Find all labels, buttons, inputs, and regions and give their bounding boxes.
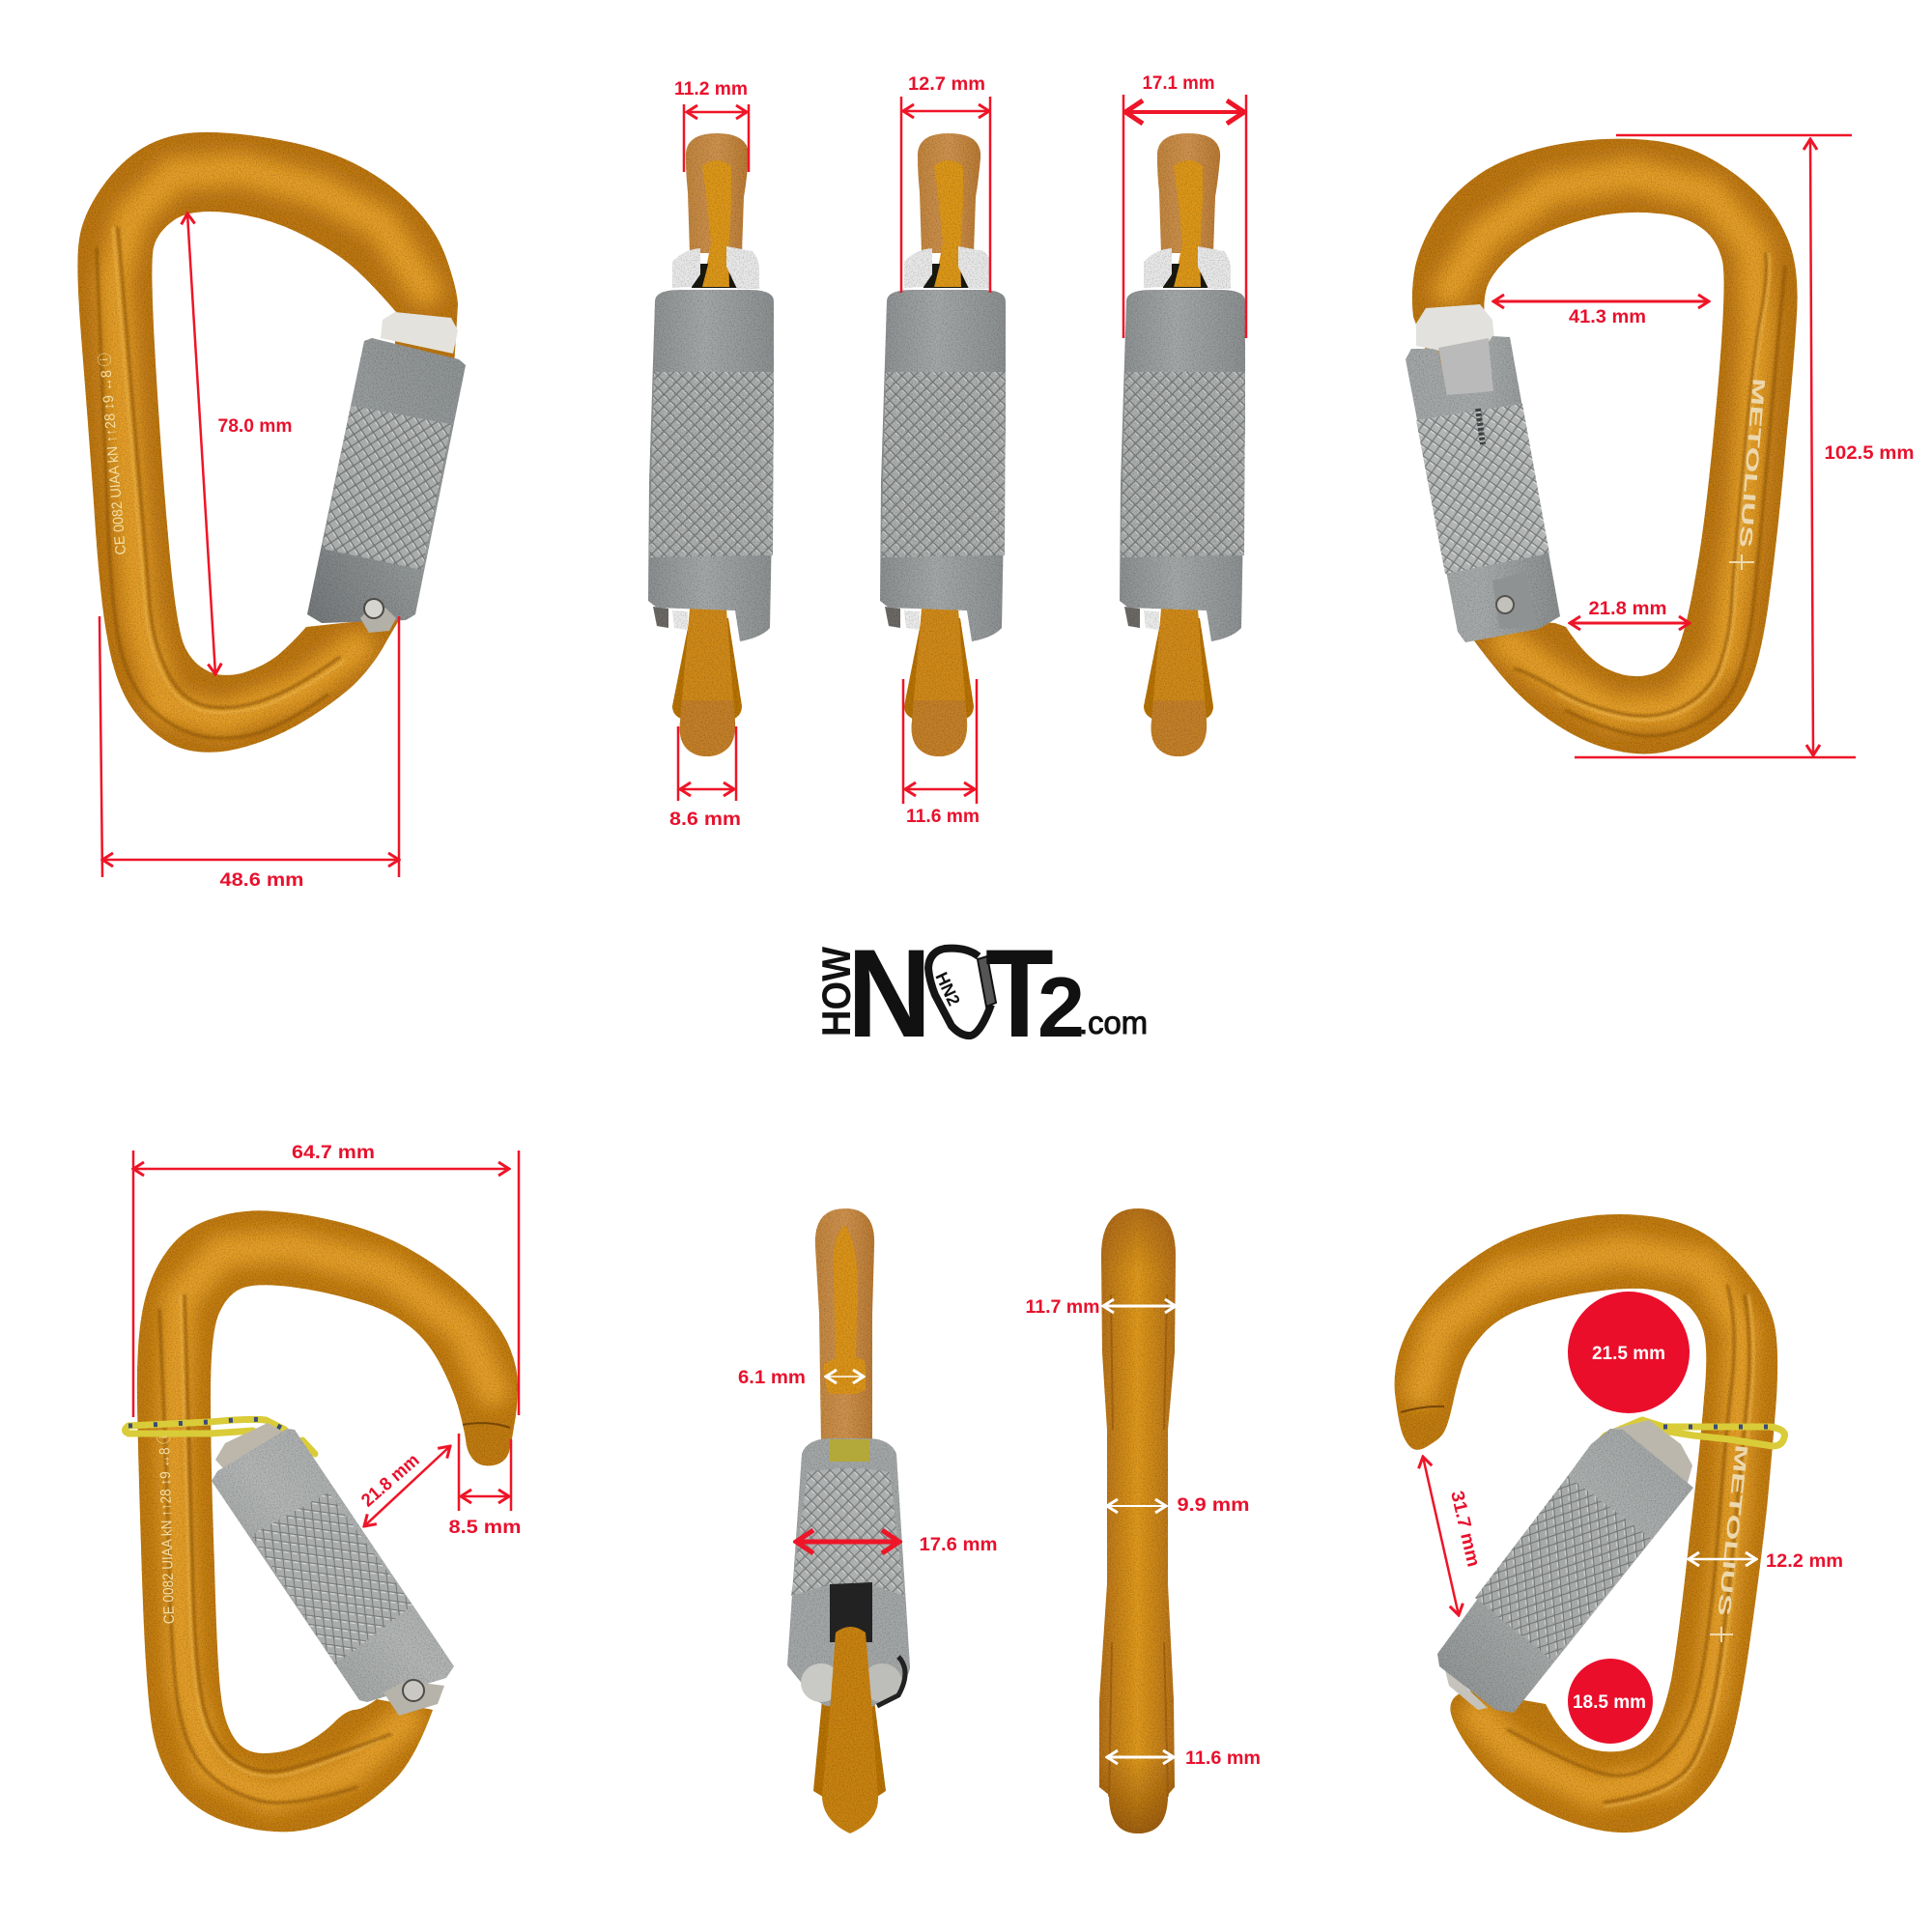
dimension: 21.8 mm gate clearance: 21.8 mm [357, 1450, 423, 1511]
dimension: 11.2 mm [674, 79, 749, 172]
spine ridge lines [1109, 1294, 1168, 1797]
dimension: 11.6 mm [903, 679, 980, 827]
dimension: 8.5 mm nose: 8.5 mm [448, 1518, 522, 1538]
logo: HowNOT2.com [813, 923, 1148, 1065]
dimension: 41.3 mm: 41.3 mm [1569, 307, 1646, 327]
carabiner body orange [130, 1203, 526, 1840]
bright hook strip [824, 1225, 866, 1394]
brand text METOLIUS: METOLIUS [1736, 378, 1769, 549]
logo .com: .com [1079, 1005, 1148, 1040]
knurled grip [322, 406, 451, 570]
orange nose [822, 1627, 878, 1833]
gate open tip [1613, 1420, 1692, 1483]
pin plate [360, 604, 396, 633]
gate white tip [381, 312, 458, 354]
dimension: 8.6 mm [669, 726, 741, 830]
logo numeral 2: 2 [1037, 959, 1085, 1055]
knurled grip [1416, 404, 1549, 574]
dimension: 11.7 mm: 11.7 mm [1026, 1297, 1099, 1318]
gate pin [1496, 596, 1514, 613]
open gate sleeve [1437, 1429, 1693, 1713]
dimension: 21.8 mm gate clearance [357, 1446, 450, 1526]
dimension: 64.7 mm: 64.7 mm [292, 1143, 375, 1163]
panel: carabiner top-right, closed gate back view [1401, 130, 1806, 768]
dimension: 11.6 mm: 11.6 mm [906, 807, 980, 827]
panel: gate side view A [648, 133, 774, 756]
yellow cord knot [830, 1439, 869, 1462]
yellow cord [1594, 1420, 1784, 1448]
circle: 18.5 mm basket [1568, 1659, 1653, 1744]
dimension: 64.7 mm [133, 1143, 519, 1417]
gate lower tip [1444, 1666, 1488, 1710]
pin slot [1492, 572, 1537, 629]
logo carabiner in place of O [928, 949, 996, 1036]
dimension: 21.8 mm [1570, 599, 1690, 623]
dark slot [830, 1582, 872, 1642]
gate pin [364, 599, 384, 618]
engraved certification text: CE 0082 UIAA kN ↑↑28 ↕9 ↔8 ⓘ [97, 352, 129, 555]
circle: 18.5 mm basket: 18.5 mm [1573, 1692, 1646, 1713]
gate open tip [215, 1423, 283, 1478]
gate white tip [1416, 304, 1494, 351]
knurled grip [251, 1492, 412, 1664]
panel: carabiner bottom-right, open gate [1386, 1208, 1784, 1840]
dimension: 78.0 mm inner length [187, 213, 292, 674]
dimension: 102.5 mm length [1575, 135, 1915, 757]
dimension: 21.8 mm: 21.8 mm [1588, 599, 1667, 619]
gate screw detail [1478, 409, 1483, 444]
logo word HOW: HOW [813, 947, 859, 1037]
dimension: 31.7 mm [1423, 1457, 1484, 1615]
dimension: 17.1 mm [1123, 73, 1246, 338]
gate notch interior [1438, 338, 1495, 398]
spine bar [1099, 1208, 1176, 1833]
gate sleeve [787, 1438, 910, 1708]
back prongs [813, 1700, 886, 1799]
logo carabiner in place of O: HN2 [931, 969, 964, 1009]
spine end shading [1099, 1208, 1176, 1833]
dimension: 12.7 mm [901, 74, 990, 293]
panel: gate side view C [1120, 133, 1245, 756]
gate sleeve [307, 338, 466, 623]
panel: gate open side view with cord [787, 1208, 910, 1833]
upper column [815, 1208, 874, 1444]
dimension: 48.6 mm width [99, 616, 399, 891]
brand star mark [1710, 1627, 1733, 1642]
dimension: 102.5 mm length: 102.5 mm [1824, 443, 1915, 464]
knurled grip [791, 1468, 904, 1596]
panel: carabiner top-left, closed gate front view [68, 126, 473, 763]
dimension: 6.1 mm: 6.1 mm [738, 1368, 806, 1388]
dimension: 48.6 mm width: 48.6 mm [220, 870, 303, 891]
dimension: 12.2 mm: 12.2 mm [1766, 1551, 1843, 1572]
panel: spine side view [1099, 1208, 1176, 1833]
panel: carabiner bottom-left, open gate [126, 1203, 526, 1840]
dimension: 17.6 mm: 17.6 mm [920, 1535, 997, 1555]
dimension: 78.0 mm inner length: 78.0 mm [218, 416, 292, 437]
dimension: 8.6 mm: 8.6 mm [669, 810, 741, 830]
silver pins [801, 1657, 905, 1706]
knurled grip [1475, 1476, 1652, 1661]
dimension: 8.5 mm nose [448, 1434, 522, 1538]
gate sleeve with notch [1406, 336, 1560, 642]
pin plate [384, 1681, 444, 1716]
dimension: 31.7 mm: 31.7 mm [1446, 1489, 1484, 1569]
dimension: 12.7 mm: 12.7 mm [908, 74, 985, 95]
brand text METOLIUS: METOLIUS [1714, 1444, 1751, 1617]
yellow cord [126, 1419, 315, 1454]
gate pin [403, 1680, 424, 1701]
dimension: 9.9 mm: 9.9 mm [1177, 1495, 1250, 1516]
logo letter N: N [847, 923, 931, 1064]
brand star mark [1729, 554, 1754, 570]
dimension: 11.6 mm: 11.6 mm [1185, 1748, 1261, 1769]
panel: gate side view B [880, 133, 1006, 756]
carabiner body orange [1386, 1208, 1782, 1840]
engraved certification text: CE 0082 UIAA kN ↑↑28 ↕9 ↔8 ⓘ [156, 1431, 178, 1624]
dimension: 6.1 mm [738, 1368, 864, 1388]
carabiner body orange [1401, 130, 1806, 768]
open gate sleeve [212, 1429, 454, 1702]
dimension: 11.2 mm: 11.2 mm [674, 79, 748, 99]
dimension: 17.1 mm: 17.1 mm [1142, 73, 1215, 94]
circle: 21.5 mm nose opening [1568, 1292, 1690, 1413]
logo letter T: T [985, 924, 1054, 1065]
circle: 21.5 mm nose opening: 21.5 mm [1592, 1344, 1665, 1364]
carabiner body orange [68, 126, 473, 763]
